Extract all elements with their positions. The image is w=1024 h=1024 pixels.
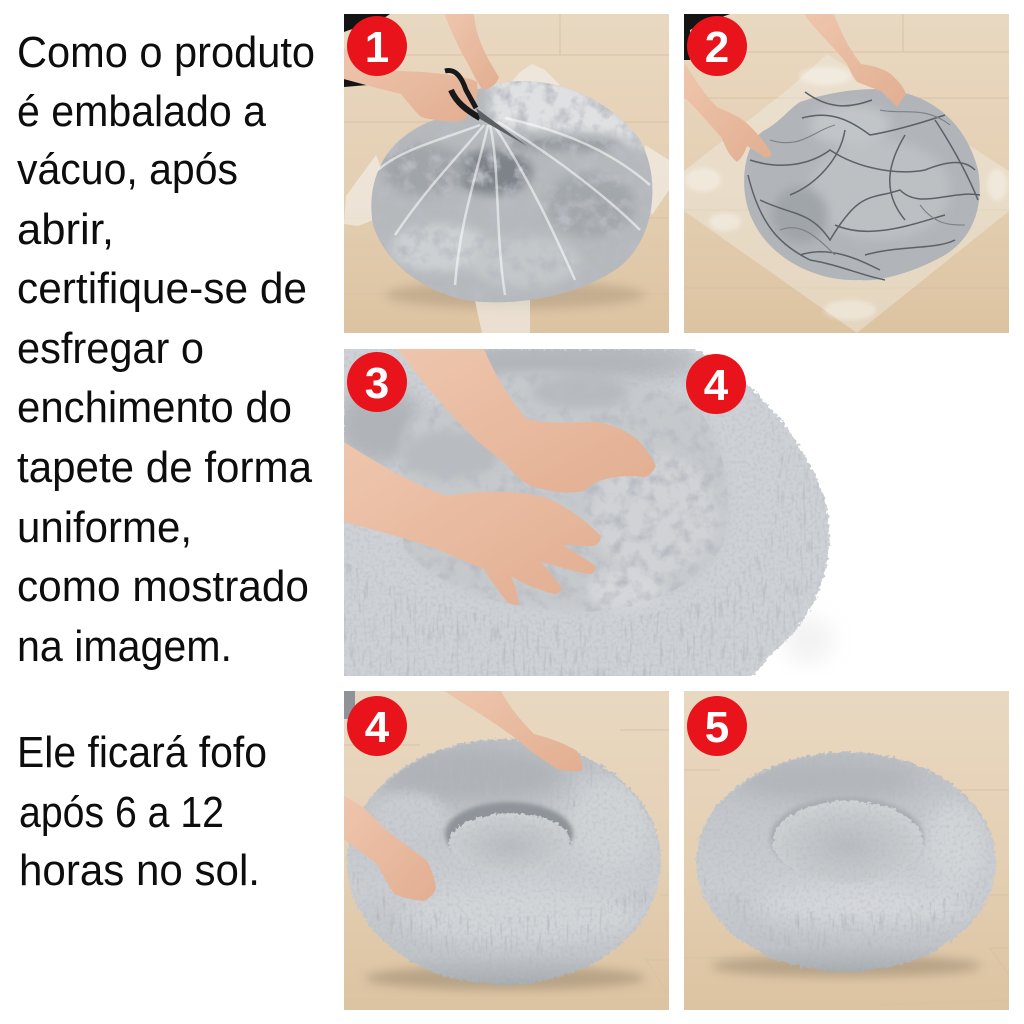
text block: instructions: enchimento do [17,383,292,432]
fluffy bed [347,739,661,985]
badge: number 4 upper [686,354,746,414]
arm: left [684,62,772,162]
text block: sun drying note: após 6 a 12 [19,788,224,837]
badge: number 4 lower: 4 [365,703,390,752]
panel: step 2 flat compressed bed [684,14,1009,333]
arm: right [804,14,906,107]
plastic flaps [344,64,669,333]
text block: instructions: uniforme, [17,503,192,552]
wrapped bed [371,81,652,302]
fur streaks [704,878,972,947]
text block: sun drying note [17,728,267,895]
panel: step 5 finished bed [684,691,1009,1010]
arm: left [344,48,478,121]
inner cushion [443,800,575,850]
text block: instructions: esfregar o [17,324,204,373]
inner cushion [769,797,926,860]
text block: instructions: Como o produto [17,28,315,77]
arm: upper [397,349,656,493]
badge: number 3: 3 [365,359,389,408]
text block: instructions: é embalado a [17,87,266,136]
text block: instructions: abrir, [17,205,114,254]
badge: number 1: 1 [365,23,389,72]
fur streaks [353,772,648,954]
text block: instructions: tapete de forma [17,443,312,492]
badge: number 5 [687,696,747,756]
arm: right [444,691,582,771]
badge: number 1 [347,16,407,76]
fluffy bed [696,752,996,972]
badge: number 4 lower [347,696,407,756]
panel: step 1 cutting the vacuum bag [344,14,669,333]
arm: lower [344,442,601,605]
badge: number 5: 5 [705,703,729,752]
arm: left [344,796,436,901]
icon: scissors [445,70,527,146]
fur streaks [344,420,840,676]
text block: instructions: vácuo, após [17,145,238,194]
flat bed [744,89,980,280]
badge: number 3 [347,352,407,412]
text block: sun drying note: Ele ficará fofo [17,728,267,777]
filling lumps [398,373,728,612]
text block: instructions: certifique-se de [17,264,307,313]
text block: instructions: na imagem. [17,622,232,671]
badge: number 4 upper: 4 [704,361,729,410]
text block: instructions: como mostrado [17,562,309,611]
fluffy bed [335,340,829,685]
badge: number 2: 2 [705,23,729,72]
panel: step 3 spreading the filling [335,340,840,685]
plastic sheet [684,54,1009,333]
sleeve [684,14,730,60]
badge: number 2 [687,16,747,76]
panel: step 4 shaping the bed [344,691,669,1010]
arm: right [444,14,499,89]
text block: instructions [17,28,315,671]
sleeves [344,14,390,87]
text block: sun drying note: horas no sol. [19,846,260,895]
filling texture [398,373,728,612]
